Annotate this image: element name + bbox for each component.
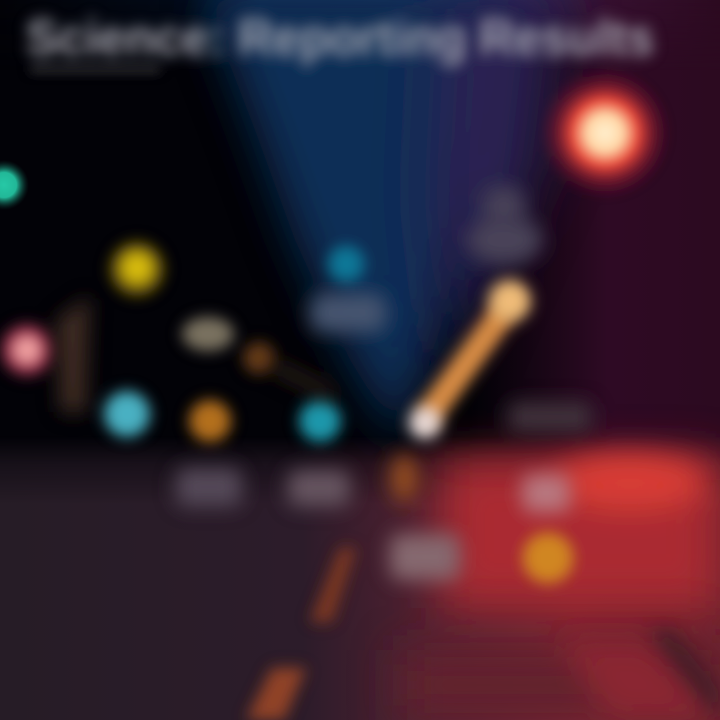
blue light wedge xyxy=(205,0,560,440)
node: orange xyxy=(189,400,231,442)
connector line xyxy=(272,360,335,400)
label box: lower left xyxy=(176,468,242,506)
label box: lower middle xyxy=(288,470,350,506)
label box: blue zone xyxy=(310,294,386,332)
label: right dim xyxy=(508,402,592,432)
road dashes xyxy=(246,548,356,720)
subtitle xyxy=(30,66,160,73)
label box: grey top right xyxy=(467,185,543,265)
glowing sun node xyxy=(539,67,671,199)
red floor glow xyxy=(400,454,720,720)
node: light blue xyxy=(104,391,150,437)
title: Science: Reporting Results xyxy=(26,9,654,66)
node: cyan xyxy=(299,400,341,442)
connector line xyxy=(56,296,90,412)
arrow: pencil diagonal xyxy=(409,280,531,439)
node: pink xyxy=(1,324,53,376)
node: orange near floor xyxy=(390,454,418,502)
label box: upper middle xyxy=(182,317,234,351)
node: blue teal xyxy=(328,246,364,282)
label box: floor right xyxy=(522,474,570,512)
node: yellow xyxy=(110,242,164,296)
node: dim orange xyxy=(243,342,275,374)
node: teal top left xyxy=(0,158,30,212)
label box: floor center xyxy=(390,534,460,580)
node: amber on floor xyxy=(523,533,573,583)
